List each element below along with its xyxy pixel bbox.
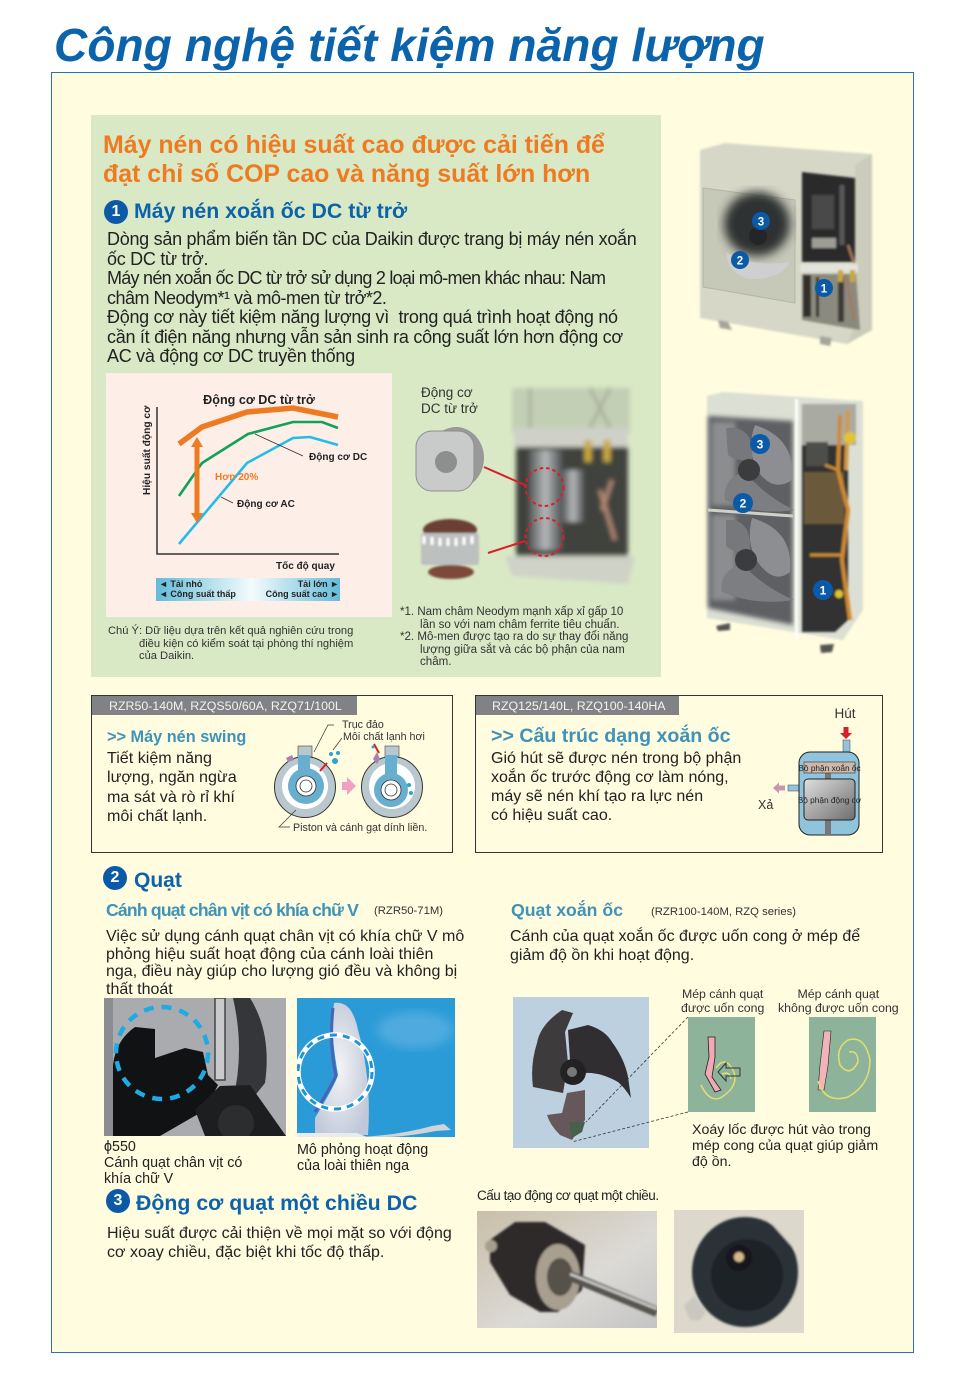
image: V-notch fan blade: [104, 998, 286, 1136]
caption: V-notch fan: ϕ550: [104, 1139, 136, 1155]
text: vortex explanation: [692, 1122, 878, 1170]
callout labels: Môi chất lạnh hơi: [343, 731, 425, 743]
note: lab data: [108, 624, 353, 662]
stator: [421, 519, 479, 579]
heading: high efficiency compressor: đạt chỉ số COP cao và năng suất lớn hơn: [103, 160, 590, 188]
suction arrow: [840, 727, 852, 739]
tag: swing models: RZR50-140M, RZQS50/60A, RZQ71/100L: [109, 699, 342, 713]
text: V-notch fan: phỏng hiệu suất hoạt động của cánh loài thiên: [106, 946, 433, 962]
load gradient bar: ◄ Tải nhỏ: [159, 579, 203, 589]
badges: [733, 434, 833, 600]
dashed circle: [298, 1035, 372, 1109]
badges: 1: [820, 584, 827, 598]
badges: 3: [758, 216, 764, 228]
load gradient bar: ◄ Công suất thấp: [159, 589, 236, 599]
text: vortex explanation: mép cong của quạt giúp giảm: [692, 1138, 878, 1154]
text: compressor description: cần ít điện năng nhưng vẫn sản sinh ra công suất lớn hơn động cơ: [107, 327, 623, 347]
footnotes: *2. Mô-men được tạo ra do sự thay đổi năng: [400, 631, 628, 643]
x axis label: Tốc độ quay: [276, 560, 335, 572]
compressor state 1: [274, 746, 340, 818]
caption: V-notch fan: khía chữ V: [104, 1171, 173, 1187]
caption: DC motor structure: Cấu tạo động cơ quạt một chiều.: [477, 1188, 659, 1203]
text: scroll structure: có hiệu suất cao.: [491, 806, 612, 824]
fan section: [703, 188, 795, 303]
footnotes: *1. Nam châm Neodym mạnh xấp xỉ gấp 10: [400, 606, 623, 618]
badge 3: 3: [114, 1192, 122, 1209]
text: spiral fan: giảm độ ồn khi hoạt động.: [510, 947, 694, 964]
text: DC fan motor: Hiệu suất được cải thiện về mọi mặt so với động: [107, 1225, 452, 1242]
image: swan in flight: [297, 998, 455, 1137]
text: compressor description: châm Neodym*¹ và mô-men từ trở*2.: [107, 288, 386, 308]
compressor body: [788, 740, 859, 835]
line: AC motor: [179, 437, 338, 544]
badge 1: [104, 200, 128, 224]
labels: uncurved blade edge: không được uốn cong: [778, 1001, 899, 1015]
heading: scroll structure: >> Cấu trúc dạng xoắn ốc: [491, 725, 731, 747]
note: lab data: điều kiện có kiểm soát tại phòng thí nghiệm: [139, 638, 353, 650]
text: vortex explanation: Xoáy lốc được hút vào trong: [692, 1122, 871, 1138]
pink arrow: [342, 777, 356, 795]
label: DC reluctance motor: [421, 385, 478, 416]
diagram: uncurved edge vortex: [809, 1017, 876, 1112]
badges: 2: [740, 496, 747, 510]
arrow: more than 20%: [191, 437, 203, 523]
image: spiral fan: [513, 997, 649, 1148]
text: compressor description: Máy nén xoắn ốc DC từ trở sử dụng 2 loại mô-men khác nhau: Nam: [107, 268, 605, 288]
text: vortex explanation: độ ồn.: [692, 1154, 731, 1170]
part labels: [798, 763, 862, 805]
tag: scroll models: RZQ125/140L, RZQ100-140HA: [492, 699, 666, 713]
text: scroll structure: [491, 749, 741, 824]
note: lab data: Chú Ý: Dữ liệu dựa trên kết quả nghiên cứu trong: [108, 625, 353, 637]
heading: high efficiency compressor: Máy nén có hiệu suất cao được cải tiến để: [103, 131, 605, 159]
text: scroll structure: xoắn ốc trước động cơ làm nóng,: [491, 768, 729, 786]
control electronics: [800, 172, 860, 330]
dashed circle: [116, 1007, 208, 1099]
footnotes: lượng giữa sắt và các bộ phận của nam: [420, 644, 625, 656]
text: swing compressor: Tiết kiệm năng: [107, 749, 212, 767]
title: Công nghệ tiết kiệm năng lượng: [54, 19, 765, 71]
label: DC reluctance motor: DC từ trở: [421, 400, 478, 416]
compressor state 2: [362, 744, 422, 818]
line: DC motor: [179, 422, 338, 496]
fans section: [708, 416, 794, 625]
image: outdoor unit single fan: [699, 142, 873, 347]
load gradient bar: Tải lớn ►: [298, 579, 339, 589]
diagram: scroll compressor: [758, 706, 862, 836]
callout labels: Trục đảo: [342, 719, 384, 731]
discharge arrow: [773, 782, 785, 794]
text: compressor description: [107, 228, 637, 366]
panel: scroll structure: [475, 695, 883, 853]
labels: curved blade edge: [681, 987, 764, 1015]
tag: swing models: [92, 696, 357, 715]
labels: curved blade edge: Mép cánh quạt: [682, 987, 763, 1001]
label: DC reluctance motor: Động cơ: [421, 385, 473, 400]
text: DC fan motor: [107, 1225, 452, 1260]
badges: 1: [821, 284, 828, 296]
label: AC motor: Động cơ AC: [237, 499, 295, 510]
caption: swan: Mô phỏng hoạt động: [297, 1142, 428, 1158]
heading: swing compressor: >> Máy nén swing: [107, 728, 246, 746]
caption: V-notch fan: Cánh quạt chân vịt có: [104, 1155, 242, 1171]
heading: V-notch propeller fan: Cánh quạt chân vịt có khía chữ V: [106, 900, 358, 920]
y axis label: Hiệu suất động cơ: [141, 405, 153, 495]
text: swing compressor: ma sát và rò rỉ khí: [107, 788, 235, 806]
badge 1: 1: [112, 203, 120, 220]
text: compressor description: AC và động cơ DC truyền thống: [107, 346, 355, 366]
suction label: Hút: [834, 706, 856, 721]
text: swing compressor: môi chất lạnh.: [107, 807, 207, 825]
labels: uncurved blade edge: [778, 987, 899, 1015]
rotor: [416, 427, 484, 491]
panel: swing compressor: [91, 695, 453, 853]
footnotes: lần so với nam châm ferrite tiêu chuẩn.: [420, 618, 619, 630]
discharge label: Xả: [758, 798, 773, 812]
badges: 3: [757, 438, 764, 452]
text: compressor description: ốc DC từ trở.: [107, 249, 208, 269]
axes: [157, 407, 339, 554]
panel: compressor section: [91, 115, 661, 677]
text: compressor description: Động cơ này tiết kiệm năng lượng vì trong quá trình hoạt động nó: [107, 307, 618, 327]
text: V-notch fan: Việc sử dụng cánh quạt chân vịt có khía chữ V mô: [106, 928, 464, 945]
badges: [731, 212, 833, 297]
text: spiral fan: [510, 927, 860, 964]
heading: high efficiency compressor: [103, 131, 605, 188]
caption: swan: của loài thiên nga: [297, 1158, 409, 1174]
line: reluctance motor: [179, 408, 338, 444]
label: more than 20%: Hơn 20%: [215, 472, 258, 483]
heading: DC fan motor: Động cơ quạt một chiều DC: [136, 1191, 417, 1215]
part labels: Bộ phận xoắn ốc: [798, 763, 861, 773]
label: AC motor: [221, 497, 295, 510]
badge 2: 2: [111, 869, 119, 886]
labels: uncurved blade edge: Mép cánh quạt: [798, 987, 879, 1001]
text: DC fan motor: cơ xoay chiều, đặc biệt khi tốc độ thấp.: [107, 1244, 384, 1260]
note: lab data: của Daikin.: [139, 650, 194, 662]
footnotes: châm.: [420, 656, 451, 668]
caption: swan: [297, 1142, 428, 1174]
load gradient bar: [156, 578, 340, 601]
text: scroll structure: máy sẽ nén khí tạo ra lực nén: [491, 787, 703, 805]
labels: curved blade edge: được uốn cong: [681, 1001, 764, 1015]
text: scroll structure: Gió hút sẽ được nén trong bộ phận: [491, 749, 741, 767]
callout labels: [293, 719, 427, 834]
load gradient bar: Công suất cao ►: [266, 589, 339, 599]
image: compressor cutaway: [416, 386, 634, 584]
text: V-notch fan: [106, 928, 464, 998]
tag: scroll models: [476, 696, 679, 715]
text: spiral fan: Cánh của quạt xoắn ốc được uốn cong ở mép để: [510, 928, 860, 945]
chart title: Động cơ DC từ trở: [203, 393, 315, 407]
image: motor stator: [674, 1210, 804, 1333]
models: spiral fan: (RZR100-140M, RZQ series): [651, 906, 796, 918]
heading: spiral fan: Quạt xoắn ốc: [511, 900, 623, 920]
text: swing compressor: [107, 749, 237, 825]
badge 2: [103, 866, 127, 890]
refrigerant and electronics section: [795, 399, 856, 639]
badges: 2: [737, 256, 743, 268]
pointer lines and dashed circles: [484, 467, 564, 556]
text: V-notch fan: thất thoát: [106, 980, 173, 998]
label: DC motor: [255, 434, 367, 463]
caption: V-notch fan: [104, 1139, 242, 1187]
panel: efficiency line chart: [106, 373, 392, 617]
label: DC motor: Động cơ DC: [309, 452, 367, 463]
badge 3: [106, 1189, 130, 1213]
part labels: Bộ phận động cơ: [798, 795, 862, 805]
image: outdoor unit double fan: [704, 392, 864, 654]
diagram: curved edge vortex: [688, 1017, 755, 1112]
connector lines: [574, 1016, 688, 1142]
text: swing compressor: lượng, ngăn ngừa: [107, 768, 237, 786]
models: V-notch fan: (RZR50-71M): [374, 905, 443, 917]
unit interior: [505, 388, 635, 584]
image: motor rotor: [477, 1211, 657, 1328]
heading: DC reluctance compressor: Máy nén xoắn ốc DC từ trở: [134, 199, 407, 223]
diagram: swing compressor: [274, 719, 427, 834]
callout lines: [279, 725, 342, 827]
callout labels: Piston và cánh gạt dính liền.: [293, 822, 427, 834]
heading: fan: Quạt: [134, 869, 182, 892]
text: V-notch fan: nga, điều này giúp cho lượng gió đều và không bị: [106, 963, 457, 980]
footnotes: [400, 606, 628, 668]
text: compressor description: Dòng sản phẩm biến tần DC của Daikin được trang bị máy nén xoắn: [107, 229, 637, 249]
